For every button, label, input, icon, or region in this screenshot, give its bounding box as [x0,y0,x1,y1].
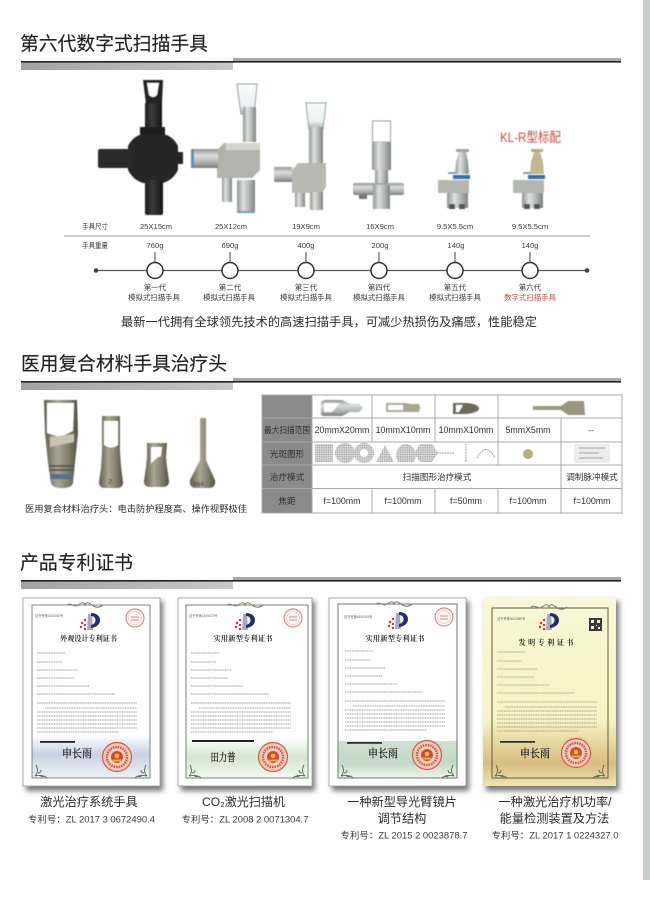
spec row: handpiece weight: 200g [372,241,388,250]
table row labels [264,424,310,506]
caption: certificate 4: 能量检测装置及方法 [500,810,609,826]
caption: certificate 1: 专利号：ZL 2017 3 0672490.4 [28,814,155,824]
spec row: handpiece size [82,221,548,231]
table row labels: 治疗模式 [270,471,305,482]
generation labels [128,283,556,302]
table scan ranges: -- [588,425,594,435]
section: handpieces [20,33,621,329]
handpiece 1: black [98,80,183,215]
table tip thumbnails [321,400,585,416]
certificate 4 [483,598,619,791]
caption: tips: 医用复合材料治疗头：电击防护程度高、操作视野极佳 [25,503,247,514]
table: tip specifications [262,395,622,513]
table focal lengths [324,496,610,506]
table focal lengths: f=100mm [510,496,546,506]
spec row: handpiece weight: 760g [147,241,163,250]
generation labels: 数字式扫描手具 [504,293,556,302]
generation labels: 模拟式扫描手具 [353,293,405,302]
heading: composite tips: 医用复合材料手具治疗头 [21,353,227,375]
handpiece 6: compact KL-R: KL-R型标配 [500,130,561,145]
table focal lengths: f=100mm [385,496,421,506]
heading rule [21,58,621,70]
caption: certificate 3: 专利号：ZL 2015 2 0023878.7 [340,830,468,840]
caption: certificate 1 [28,795,155,824]
heading rule [21,378,621,390]
section: composite treatment tips [21,353,622,514]
generation labels: 模拟式扫描手具 [203,293,255,302]
certificate 1: 申长雨 [62,746,92,760]
caption: certificate 2: 专利号：ZL 2008 2 0071304.7 [182,814,308,824]
handpiece 3: silver [274,103,326,210]
caption: certificate 2: CO₂激光扫描机 [202,795,285,809]
table scan ranges [315,425,594,435]
spec row: handpiece weight: 140g [522,241,538,250]
certificate 1 [23,598,163,791]
caption: certificate 4: 一种激光治疗机功率/ [498,794,612,809]
section: patents [20,552,621,840]
handpiece 2: silver [191,84,260,213]
tip 3 [144,443,169,487]
table scan ranges: 10mmX10mm [376,425,430,435]
generation labels: 第三代 [295,283,318,292]
handpiece 5: compact [438,149,470,209]
heading: sixth generation digital scanning handpiece: 第六代数字式扫描手具 [20,33,208,55]
generation labels: 模拟式扫描手具 [280,293,332,302]
photo: four treatment tips [44,400,215,488]
certificate 4: 发明专利证书 [518,638,574,647]
caption: certificate 1: 激光治疗系统手具 [40,795,138,809]
certificate 2 [178,598,315,791]
table focal lengths: f=100mm [324,496,360,506]
tip 2 [99,416,123,488]
slogan: 最新一代拥有全球领先技术的高速扫描手具，可减少热损伤及痛感，性能稳定 [121,314,537,329]
certificate 4: 证书号第3042589号 [497,616,525,621]
handpiece 6: compact KL-R [500,130,561,209]
heading rule [21,577,621,589]
generation labels: 第五代 [444,283,467,292]
certificate 4: 申长雨 [520,746,550,760]
caption: certificate 2 [182,795,308,824]
table row labels: 最大扫描范围 [264,424,310,435]
generation labels: 模拟式扫描手具 [128,293,180,302]
timeline [94,252,589,278]
tip 4: 3&4 [193,482,204,488]
table treatment modes: 扫描图形治疗模式 [403,471,472,482]
heading: patents: 产品专利证书 [20,552,133,574]
certificate 2: 证书号第1305473号 [189,613,217,618]
certificate 2: 实用新型专利证书 [214,634,273,643]
certificate 2: 田力普 [210,750,236,764]
table row labels: 焦距 [278,495,296,506]
caption: certificate 4 [492,794,618,840]
certificate 3: 申长雨 [368,746,398,760]
caption: certificate 4: 专利号：ZL 2017 1 0224327.0 [492,830,618,840]
table treatment modes [403,471,618,482]
spec row: handpiece weight: 手具重量 [82,240,108,250]
caption: certificate 3: 一种新型导光臂镜片 [347,794,457,809]
table row-header column [262,395,312,513]
table spot patterns [315,443,610,463]
table scan ranges: 20mmX20mm [315,425,369,435]
certificate 3: 实用新型专利证书 [366,634,425,643]
table focal lengths: f=100mm [574,496,610,506]
table focal lengths: f=50mm [450,496,482,506]
table row labels: 光斑图形 [270,448,305,459]
table scan ranges: 10mmX10mm [439,425,493,435]
generation labels: 第四代 [368,283,391,292]
spec row: handpiece size: 16X9cm [366,222,394,231]
tip 4 [190,418,215,488]
spec row: handpiece size: 25X15cm [140,222,172,231]
spec row: handpiece weight: 690g [222,241,238,250]
table scan ranges: 5mmX5mm [506,425,550,435]
spec row: handpiece weight: 400g [298,241,314,250]
certificate 1: 证书号第4203492号 [35,613,63,618]
spec row: handpiece size: 9.5X5.5cm [512,222,548,231]
QR code [589,618,602,631]
generation labels: 第二代 [219,283,242,292]
handpiece 4: silver cross [353,121,404,209]
generation labels: 第一代 [144,283,167,292]
spec row: handpiece size: 25X12cm [215,222,247,231]
spec row: handpiece size: 手具尺寸 [82,221,108,231]
certificate 1: 外观设计专利证书 [60,634,118,643]
tip 1 [44,400,78,488]
caption: certificate 3 [340,794,468,840]
spec row: handpiece size: 9.5X5.5cm [437,222,473,231]
tip 2: 2 [108,477,112,486]
generation labels: 模拟式扫描手具 [429,293,481,302]
spec row: handpiece size: 19X9cm [292,222,320,231]
right edge strip [643,0,650,880]
spec row: handpiece weight [82,240,538,250]
caption: certificate 3: 调节结构 [378,810,426,826]
certificate 3 [329,598,469,791]
certificate 3: 证书号第4895245号 [344,614,372,619]
generation labels: 第六代 [519,283,542,292]
table treatment modes: 调制脉冲模式 [566,471,618,482]
spec row: handpiece weight: 140g [448,241,464,250]
